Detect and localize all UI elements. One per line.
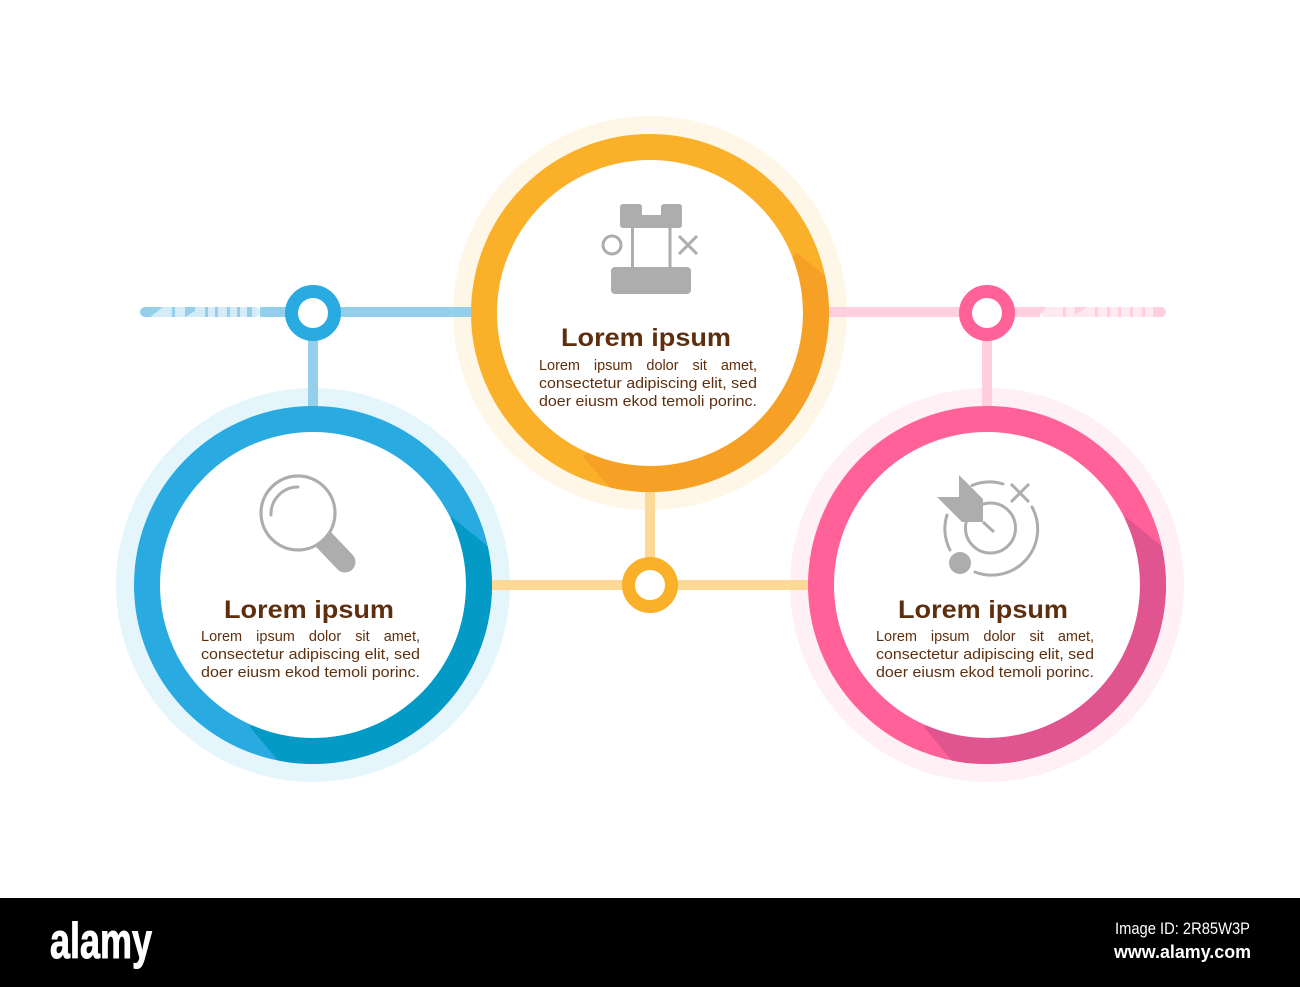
connector: blue line (140, 307, 475, 415)
pink heading: Lorem ipsum (898, 596, 1068, 624)
pink ring shadow (924, 517, 1166, 764)
blue body text (201, 629, 420, 681)
node: blue (292, 292, 334, 334)
footer logo: alamy (50, 913, 152, 969)
blue body text: consectetur adipiscing elit, sed (201, 647, 420, 663)
blue ring (147, 419, 479, 751)
orange body text: Lorem ipsum dolor sit amet, (539, 358, 757, 374)
blue heading: Lorem ipsum (224, 596, 394, 624)
footer image id: Image ID: 2R85W3P (1115, 919, 1250, 938)
panel: blue circle (134, 406, 492, 764)
halo: pink (790, 388, 1184, 782)
blue body text: Lorem ipsum dolor sit amet, (201, 629, 420, 645)
connector: pink line (825, 307, 1166, 415)
node: orange (628, 564, 672, 606)
pink ring (821, 419, 1153, 751)
footer band (0, 898, 1300, 987)
footer url: www.alamy.com (1113, 942, 1251, 962)
orange body text: doer eiusm ekod temoli porinc. (539, 394, 757, 410)
connector: orange line (485, 480, 815, 590)
blue ring shadow (250, 517, 492, 764)
blue body text: doer eiusm ekod temoli porinc. (201, 665, 420, 681)
halo: orange (453, 116, 847, 510)
icon: chess rook (603, 204, 697, 294)
orange ring (484, 147, 816, 479)
pink body text: Lorem ipsum dolor sit amet, (876, 629, 1094, 645)
icon: target with arrow (937, 475, 1038, 575)
pink body text: doer eiusm ekod temoli porinc. (876, 665, 1094, 681)
orange body text: consectetur adipiscing elit, sed (539, 376, 757, 392)
icon: magnifying glass (261, 476, 345, 562)
orange body text (539, 358, 757, 410)
node: pink (966, 292, 1008, 334)
orange heading: Lorem ipsum (561, 324, 731, 352)
halo: blue (116, 388, 510, 782)
panel: orange circle (471, 134, 829, 492)
panel: pink circle (808, 406, 1166, 764)
pink body text (876, 629, 1094, 681)
pink body text: consectetur adipiscing elit, sed (876, 647, 1094, 663)
orange ring shadow (584, 253, 829, 492)
